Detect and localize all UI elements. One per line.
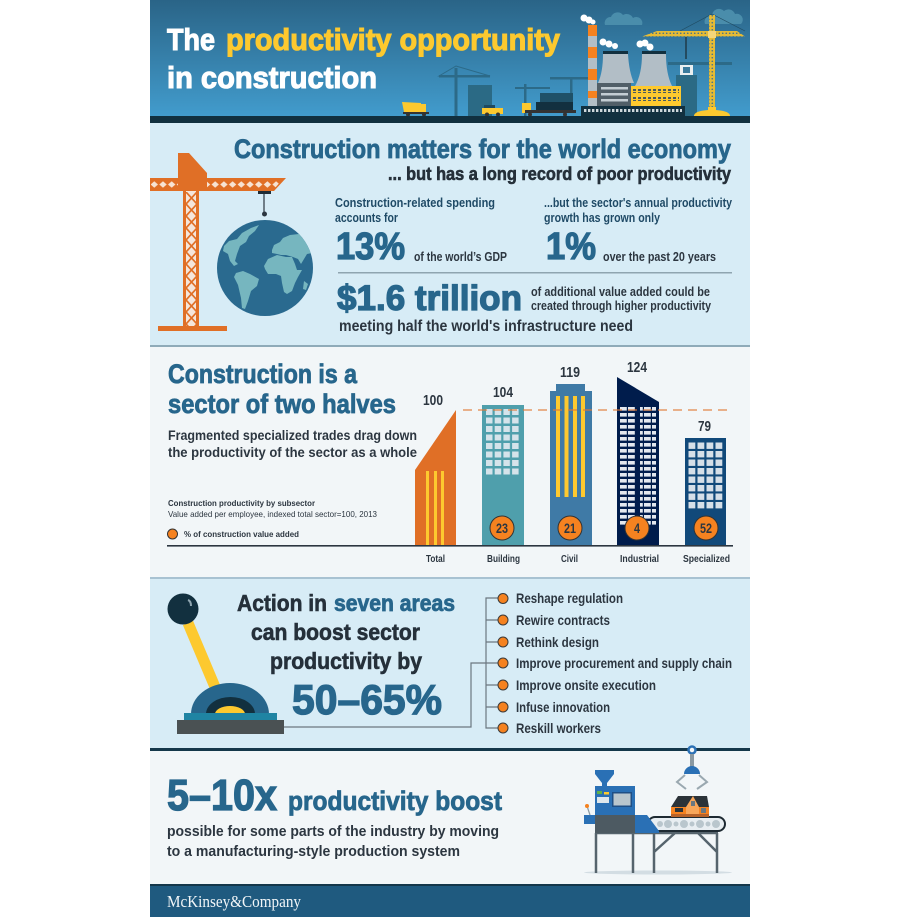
text block xyxy=(167,823,499,860)
bar: building xyxy=(482,384,524,565)
legend: Construction productivity by subsector xyxy=(168,498,316,508)
icon: factory machine with house xyxy=(584,746,732,874)
stat: 1% growth: ...but the sector's annual productivity xyxy=(544,196,732,210)
stat: 13% of GDP: 13% xyxy=(336,226,405,268)
connector xyxy=(284,598,498,728)
icon: lever xyxy=(168,594,284,734)
bar: industrial xyxy=(617,359,659,565)
heading: sector of two halves xyxy=(168,389,396,419)
legend xyxy=(168,498,377,539)
title xyxy=(167,22,561,95)
legend: % of construction value added xyxy=(184,529,299,539)
list: seven areas: Reskill workers xyxy=(516,720,601,736)
bar: specialized: 79 xyxy=(698,418,711,435)
heading xyxy=(237,590,455,674)
stat: $1.6 trillion: of additional value added could be xyxy=(531,285,710,299)
bar: industrial: 4 xyxy=(634,520,640,536)
stat: 1% growth xyxy=(544,196,732,268)
stat: 1% growth: growth has grown only xyxy=(544,211,660,225)
bar: total xyxy=(415,392,456,565)
list: seven areas: Rewire contracts xyxy=(516,612,610,628)
panel: productivity boost xyxy=(150,746,750,884)
stat: 13% of GDP xyxy=(335,196,507,268)
panel: seven areas xyxy=(150,579,750,751)
text block: possible for some parts of the industry by moving xyxy=(167,823,499,840)
text block: Fragmented specialized trades drag down xyxy=(168,427,417,443)
icon: crane lifting globe xyxy=(150,153,313,331)
bar: specialized: 52 xyxy=(700,520,712,536)
list: seven areas xyxy=(498,590,732,736)
title: The xyxy=(167,22,215,57)
bar: building: 23 xyxy=(496,520,508,536)
list: seven areas: Reshape regulation xyxy=(516,590,623,606)
bar: specialized: Specialized xyxy=(683,553,730,565)
bar: specialized xyxy=(683,418,730,565)
stat: $1.6 trillion: created through higher productivity xyxy=(531,299,711,313)
bar: total: Total xyxy=(426,553,445,565)
stat: $1.6 trillion xyxy=(337,279,711,335)
heading: Construction is a xyxy=(168,359,358,389)
subheading: ... but has a long record of poor productivity xyxy=(388,164,731,184)
bar: building: Building xyxy=(487,553,520,565)
stat: 1% growth: 1% xyxy=(546,226,596,268)
illustration: construction skyline xyxy=(402,9,745,116)
bar: civil xyxy=(550,364,592,565)
heading: Action in xyxy=(237,590,327,616)
bar: industrial: Industrial xyxy=(620,553,659,565)
bar: civil: Civil xyxy=(561,553,578,565)
bar: civil: 21 xyxy=(564,520,576,536)
heading: can boost sector xyxy=(251,619,420,645)
list: seven areas: Rethink design xyxy=(516,634,599,650)
list: seven areas: Improve procurement and supply chain xyxy=(516,655,732,671)
bar: total: 100 xyxy=(423,392,443,409)
heading: Construction matters for the world economy xyxy=(234,134,731,164)
logo text: McKinsey&Company xyxy=(167,892,302,911)
stat: 5-10x: 5–10x xyxy=(167,771,277,820)
text block: to a manufacturing-style production system xyxy=(167,843,460,860)
stat: $1.6 trillion: meeting half the world's infrastructure need xyxy=(339,318,633,335)
heading: productivity by xyxy=(270,648,422,674)
stat: 13% of GDP: Construction-related spending xyxy=(335,196,495,210)
heading: seven areas xyxy=(334,590,455,616)
list: seven areas: Improve onsite execution xyxy=(516,677,656,693)
header banner xyxy=(150,0,750,123)
bar: industrial: 124 xyxy=(627,359,648,376)
bar: building: 104 xyxy=(493,384,514,401)
stat: 13% of GDP: accounts for xyxy=(335,211,398,225)
stat: 13% of GDP: of the world’s GDP xyxy=(414,250,507,264)
footer xyxy=(150,884,750,917)
stat: 1% growth: over the past 20 years xyxy=(603,250,716,264)
panel: two halves xyxy=(150,347,750,579)
bar: civil: 119 xyxy=(560,364,580,381)
text block xyxy=(168,427,417,460)
title: in construction xyxy=(167,60,377,95)
title: productivity opportunity xyxy=(226,22,561,57)
heading: productivity boost xyxy=(288,786,502,816)
stat: 50-65%: 50–65% xyxy=(292,676,442,723)
stat: $1.6 trillion: $1.6 trillion xyxy=(337,279,522,318)
heading xyxy=(168,359,396,419)
bar chart: productivity by subsector xyxy=(167,359,733,565)
legend: Value added per employee, indexed total sector=100, 2013 xyxy=(168,509,377,519)
list: seven areas: Infuse innovation xyxy=(516,699,610,715)
text block: the productivity of the sector as a whole xyxy=(168,444,417,460)
panel: construction matters xyxy=(150,123,750,347)
